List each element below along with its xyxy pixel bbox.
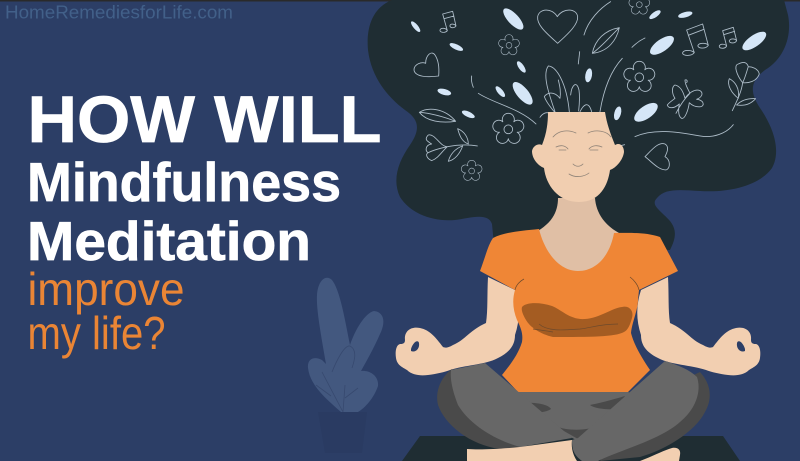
pants centre: [500, 392, 650, 441]
head: [532, 112, 624, 202]
mat: [402, 436, 740, 461]
petals: [410, 5, 769, 125]
finger gaps: [411, 341, 745, 352]
shirt: [480, 229, 678, 392]
nose: [573, 164, 583, 166]
title: [27, 82, 382, 272]
eyes: [556, 146, 602, 150]
butterfly: [667, 80, 703, 118]
flowers: [624, 61, 655, 91]
flowing lines: [584, 2, 611, 35]
facial features: [553, 131, 611, 177]
subtitle line: my life: my life?: [28, 307, 166, 359]
meditating woman: [368, 0, 789, 461]
right foot: [640, 448, 680, 461]
face: [532, 112, 624, 202]
pants left outer shadow: [437, 369, 530, 449]
plant leaves: [308, 278, 383, 412]
subtitle: [28, 263, 184, 359]
eyebrows: [553, 131, 611, 137]
watermark: HomeRemediesforLife.com: [5, 2, 233, 22]
left foot: [467, 440, 577, 461]
flower branch right: [729, 62, 759, 111]
pants: [437, 361, 710, 461]
line drawings: [414, 0, 759, 180]
plant pot: [318, 412, 367, 453]
flower branch left: [426, 129, 477, 161]
plant sprout: [540, 66, 592, 117]
pants right leg: [572, 361, 699, 461]
heading: how will: HOW WILL: [28, 82, 382, 156]
shirt shadow: [522, 303, 633, 337]
shirt folds: [515, 277, 639, 332]
neck: [530, 198, 628, 285]
pants left leg: [451, 363, 572, 447]
hearts: [538, 10, 578, 43]
music notes: [440, 11, 456, 32]
potted plant: [308, 278, 383, 453]
subtitle line: improve: improve: [28, 263, 184, 315]
pants right outer shadow: [600, 372, 710, 461]
left arm: [396, 277, 519, 375]
hair doodles: [410, 0, 769, 180]
feet: [467, 440, 680, 461]
hair: [368, 0, 789, 250]
right arm: [637, 277, 760, 375]
heading: meditation: Meditation: [27, 210, 311, 272]
heading: mindfulness: Mindfulness: [27, 151, 341, 213]
leaves: [592, 28, 619, 53]
mouth: [569, 173, 589, 177]
